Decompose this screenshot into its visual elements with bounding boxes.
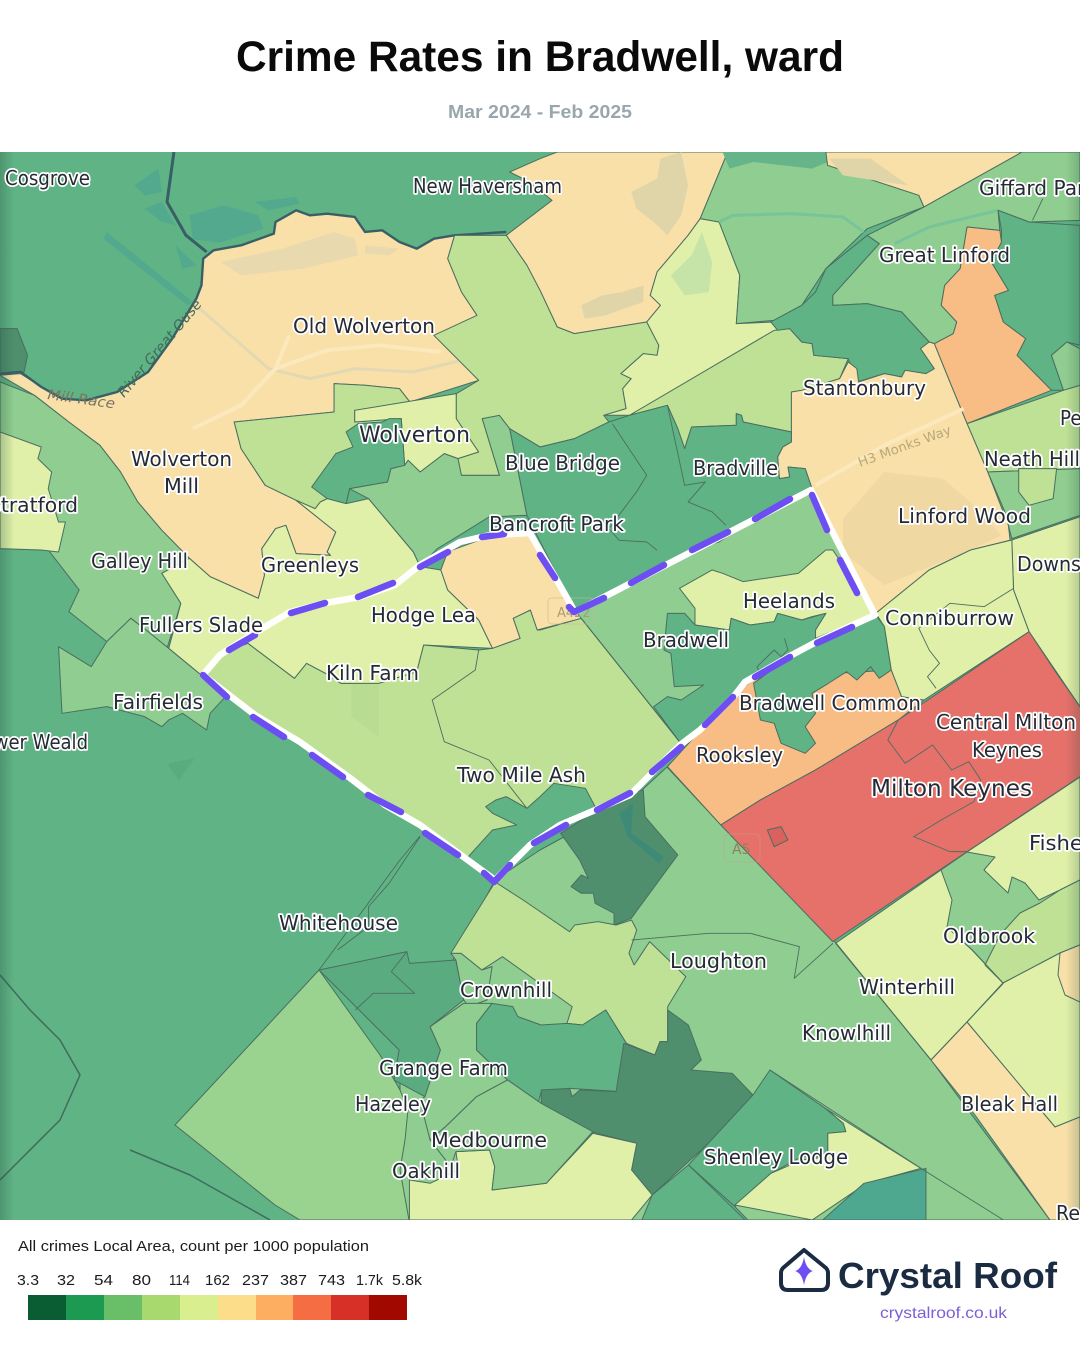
place labels: Winterhill [859,975,955,999]
place labels: Great Linford [879,243,1010,267]
place labels: Fullers Slade [139,613,263,637]
place labels: Mill [164,474,199,498]
place labels: Kiln Farm [326,661,419,685]
legend scale values: 1.7k [356,1272,383,1289]
legend scale values: 3.3 [17,1272,39,1289]
road shield: A422 [548,598,594,624]
place labels: Loughton [670,949,767,973]
place labels: Hazeley [355,1092,431,1116]
place labels: Bleak Hall [961,1092,1058,1116]
place labels: Whitehouse [279,911,398,935]
legend scale values: 5.8k [392,1272,423,1289]
place labels [0,166,1080,1225]
legend scale values: 54 [94,1272,113,1289]
legend [17,1238,423,1320]
place labels: Hodge Lea [371,603,476,627]
legend scale values: 80 [132,1272,151,1289]
road shield: A5 [724,834,760,862]
brand name: Crystal Roof [838,1255,1058,1296]
website url: crystalroof.co.uk [880,1305,1008,1322]
place labels: Neath Hill [984,447,1080,471]
river label: River Great Ouse: River Great Ouse [115,297,205,401]
legend scale values: 387 [280,1272,307,1289]
ward boundary: Bradwell [203,490,875,882]
place labels: Old Wolverton [293,314,435,338]
place labels: Conniburrow [885,606,1014,630]
place labels: Oldbrook [943,924,1035,948]
place labels: Central Milton [936,710,1076,734]
place labels: Knowlhill [802,1021,891,1045]
place labels: Oakhill [392,1159,460,1183]
place labels: Bradville [693,456,778,480]
road shield: A5: A5 [732,842,750,858]
legend scale values: 114 [169,1272,190,1289]
legend scale values: 32 [57,1272,75,1289]
place labels: Heelands [743,589,835,613]
icon: Crystal Roof house logo [781,1250,828,1290]
legend scale values [17,1272,423,1289]
place labels: Bradwell [643,628,729,652]
place labels: Grange Farm [379,1056,508,1080]
place labels: Medbourne [431,1128,547,1152]
place labels: Stantonbury [803,376,926,400]
place labels: Crownhill [460,978,552,1002]
place labels: Milton Keynes [871,776,1032,802]
road shield: A422: A422 [557,606,591,621]
place labels: Wolverton [131,447,232,471]
place labels: Galley Hill [91,549,188,573]
choropleth map [0,152,1080,1220]
place labels: New Haversham [413,174,562,198]
title: Crime Rates in Bradwell, ward [236,33,844,81]
place labels: Linford Wood [898,504,1031,528]
place labels: Keynes [972,738,1042,762]
river label: Mill Race: Mill Race [46,387,116,412]
place labels: Two Mile Ash [456,763,586,787]
legend scale values: 237 [242,1272,269,1289]
place labels: Greenleys [261,553,359,577]
date range subtitle: Mar 2024 - Feb 2025 [448,102,632,122]
place labels: Rooksley [696,743,783,767]
place labels: Cosgrove [5,166,90,190]
place labels: Shenley Lodge [704,1145,848,1169]
place labels: Bradwell Common [739,691,921,715]
legend title: All crimes Local Area, count per 1000 population [18,1238,369,1255]
place labels: Fairfields [113,690,203,714]
place labels: Blue Bridge [505,451,620,475]
road label: H3 Monks Way: H3 Monks Way [856,423,954,471]
place labels: Wolverton [359,423,470,448]
legend scale values: 162 [205,1272,230,1289]
place labels: Bancroft Park [489,512,624,536]
legend colour ramp [28,1295,407,1320]
legend scale values: 743 [318,1272,345,1289]
